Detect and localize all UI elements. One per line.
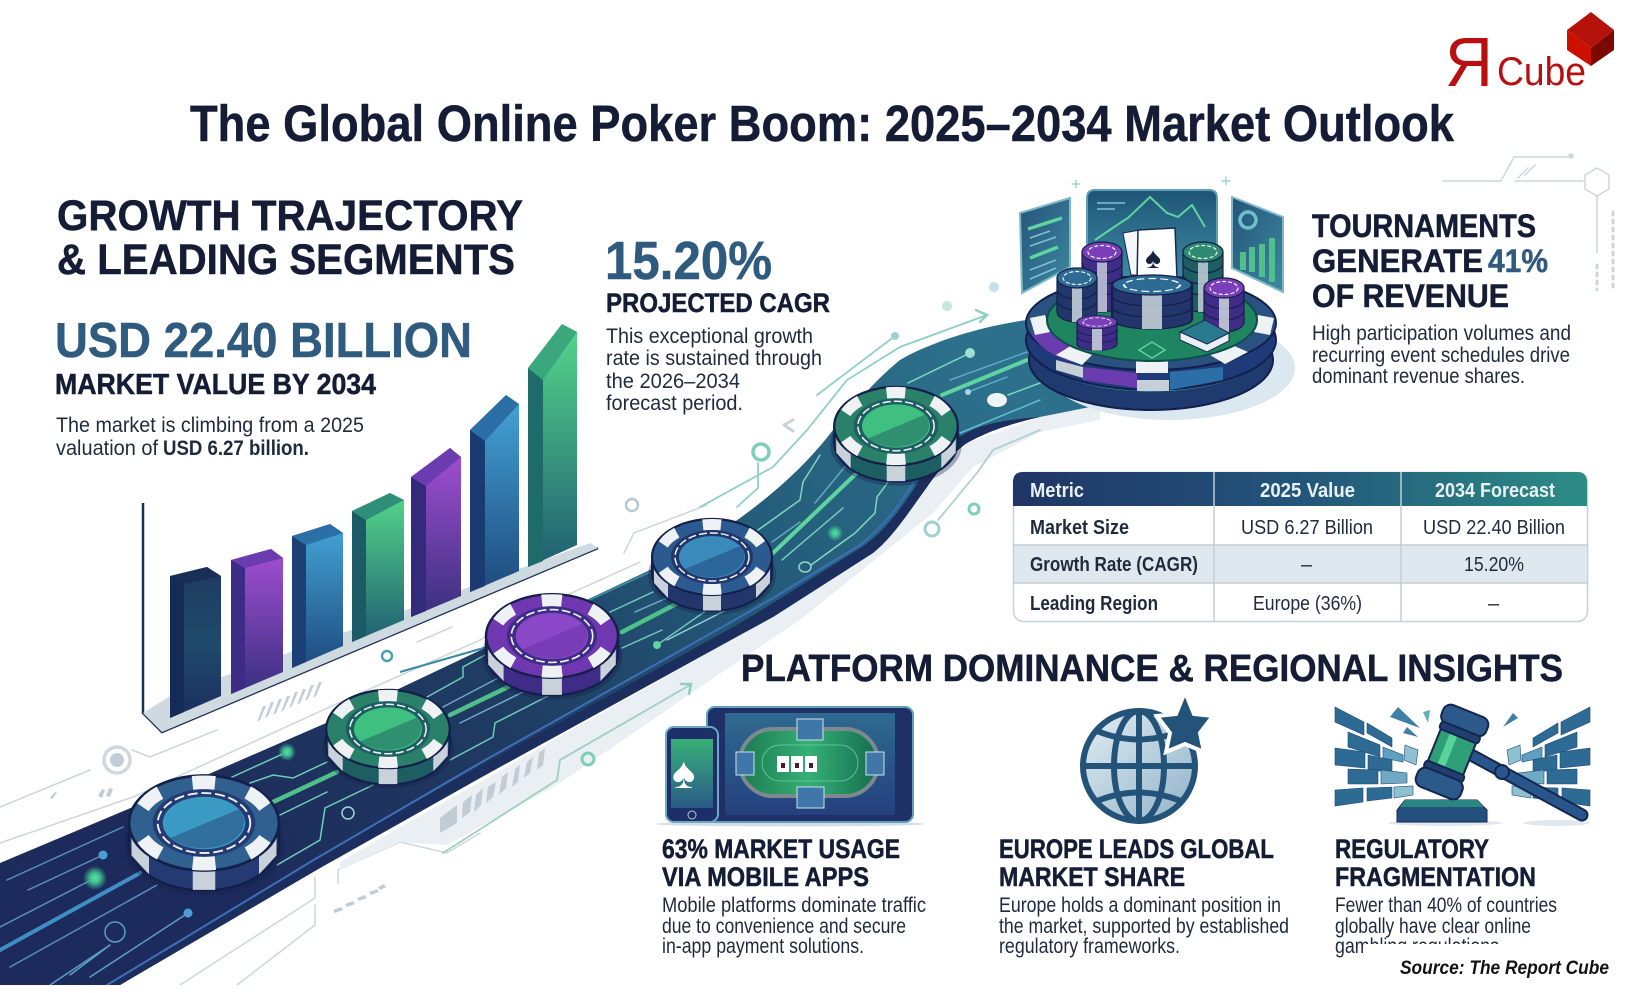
table row: market size: USD 22.40 Billion	[1423, 517, 1565, 539]
road circuit traces	[0, 348, 1040, 985]
hatch marks beside the road	[50, 682, 545, 913]
bar 2	[231, 549, 283, 694]
table row: growth rate: –	[1301, 554, 1313, 576]
table header labels: 2025 Value	[1260, 480, 1355, 502]
card: regulation	[1335, 834, 1557, 960]
platform middle layer	[1026, 290, 1276, 391]
stat: market value	[55, 314, 472, 460]
left bricks	[1335, 707, 1418, 806]
bar 1	[170, 567, 221, 718]
cards on table	[777, 756, 817, 772]
card: mobile apps	[662, 834, 926, 958]
logo wordmark: Cube	[1497, 50, 1586, 94]
table row: market size: USD 6.27 Billion	[1241, 517, 1373, 539]
table row: leading region: Leading Region	[1030, 593, 1158, 615]
bar 6	[470, 395, 519, 592]
road lower edge band	[110, 417, 1040, 985]
tablet screen	[725, 713, 895, 815]
chart base plate	[143, 543, 598, 732]
card: mobile apps: VIA MOBILE APPS	[662, 862, 869, 892]
card: europe: Europe holds a dominant position in	[999, 894, 1281, 917]
card: europe: regulatory frameworks.	[999, 935, 1180, 958]
icon: gavel breaking brick walls	[1335, 702, 1590, 826]
phone	[666, 727, 718, 822]
star	[1157, 692, 1213, 752]
heading: growth trajectory	[57, 192, 523, 284]
platform top rim	[1026, 276, 1276, 370]
stat: projected CAGR: forecast period.	[606, 392, 743, 415]
table header labels: 2034 Forecast	[1435, 480, 1555, 502]
table header labels	[1030, 480, 1555, 502]
bar 7	[528, 324, 577, 567]
bar 5	[411, 448, 461, 617]
platform rim stripes	[1030, 282, 1274, 373]
table row: growth rate: 15.20%	[1464, 554, 1524, 576]
card: regulation: Fewer than 40% of countries	[1335, 894, 1557, 917]
icon shadow	[655, 822, 925, 826]
icon: globe with star	[1083, 692, 1213, 821]
stat: projected CAGR: This exceptional growth	[606, 325, 813, 348]
stat: market value: USD 22.40 BILLION	[55, 314, 472, 368]
center chart panel	[1087, 190, 1217, 285]
felt diamond	[1139, 342, 1165, 358]
logo cube	[1567, 12, 1614, 66]
phone: ♠	[672, 749, 695, 798]
cards: ♠	[1145, 242, 1161, 275]
stat: market value: The market is climbing from a 2025	[56, 414, 364, 437]
table frame	[1014, 472, 1588, 622]
card: regulation: FRAGMENTATION	[1335, 862, 1536, 892]
right bricks	[1507, 707, 1590, 806]
road edge lines	[107, 480, 915, 985]
heading: growth trajectory: & LEADING SEGMENTS	[57, 236, 515, 284]
card: mobile apps: due to convenience and secure	[662, 915, 906, 938]
gavel handle	[1462, 750, 1582, 815]
source note: Source: The Report Cube	[1400, 958, 1609, 979]
circuit road track	[0, 320, 1100, 985]
card: europe: MARKET SHARE	[999, 862, 1185, 892]
table shaded row	[1014, 545, 1587, 583]
tablet	[707, 707, 913, 822]
left dashboard panel	[1020, 198, 1070, 293]
heading: growth trajectory: GROWTH TRAJECTORY	[57, 192, 523, 240]
heading: platform dominance: PLATFORM DOMINANCE & REGIONAL INSIGHTS	[741, 648, 1563, 690]
card: europe	[999, 834, 1289, 958]
platform shadow	[1045, 316, 1295, 420]
text: tournaments: OF REVENUE	[1312, 278, 1509, 314]
stat: market value: USD 6.27 billion.	[163, 437, 309, 460]
icon: mobile and tablet poker table	[655, 707, 925, 826]
text: tournaments: recurring event schedules drive	[1312, 344, 1570, 367]
card: mobile apps: 63% MARKET USAGE	[662, 834, 900, 864]
stat: projected CAGR	[605, 231, 830, 415]
bar 4	[352, 493, 404, 642]
title: The Global Online Poker Boom: 2025–2034 Market Outlook	[190, 95, 1455, 152]
stat: projected CAGR: 15.20%	[605, 231, 772, 291]
card: regulation: REGULATORY	[1335, 834, 1489, 864]
card: europe: the market, supported by established	[999, 915, 1289, 938]
chip 4: blue	[648, 519, 776, 615]
card: mobile apps: in-app payment solutions.	[662, 935, 864, 958]
illustration: tournament platform	[1020, 190, 1295, 420]
stat: projected CAGR: the 2026–2034	[606, 370, 740, 393]
text: tournaments: 41%	[1488, 243, 1548, 279]
text: tournaments: High participation volumes and	[1312, 322, 1571, 345]
shadows	[1388, 820, 1590, 826]
bar 3	[292, 524, 343, 668]
stat: projected CAGR: PROJECTED CAGR	[606, 288, 830, 318]
card: regulation: globally have clear online	[1335, 915, 1531, 938]
chart axes	[143, 503, 598, 732]
platform base layer	[1029, 310, 1273, 410]
card: europe: EUROPE LEADS GLOBAL	[999, 834, 1274, 864]
card: regulation: gambling regulations	[1335, 935, 1499, 958]
table row: leading region	[1030, 593, 1500, 615]
stat: market value: MARKET VALUE BY 2034	[55, 369, 376, 401]
stat: market value: valuation of	[56, 437, 158, 460]
bar chart: growth	[143, 324, 598, 732]
chip stacks	[1082, 242, 1122, 312]
text: tournaments	[1312, 208, 1571, 388]
table row: growth rate: Growth Rate (CAGR)	[1030, 554, 1198, 576]
table row: market size	[1030, 517, 1565, 539]
text: tournaments: GENERATE	[1312, 243, 1483, 279]
gavel head	[1413, 702, 1491, 802]
chip 3: purple	[482, 594, 622, 700]
gavel base	[1397, 800, 1487, 822]
chip 2: green	[322, 690, 454, 789]
stat: projected CAGR: rate is sustained through	[606, 347, 822, 370]
table row: leading region: –	[1488, 593, 1500, 615]
card: mobile apps: Mobile platforms dominate traffic	[662, 894, 926, 917]
data table	[1013, 472, 1588, 622]
platform felt	[1047, 279, 1257, 361]
globe	[1083, 711, 1195, 821]
table header	[1013, 472, 1587, 506]
platform purple rim section	[1032, 325, 1085, 362]
logo mirrored R: R	[1445, 23, 1493, 101]
chip 5: green	[830, 387, 962, 486]
card deck	[1180, 320, 1229, 352]
logo: RCube	[1445, 12, 1614, 101]
table header labels: Metric	[1030, 480, 1084, 502]
cards	[1123, 228, 1177, 282]
table row: leading region: Europe (36%)	[1253, 593, 1362, 615]
table row: market size: Market Size	[1030, 517, 1129, 539]
right dashboard panel	[1232, 197, 1283, 292]
debris	[1390, 707, 1518, 737]
teal circuit accents and arrows	[104, 177, 1230, 853]
table row: growth rate	[1030, 554, 1524, 576]
light band beneath the road	[340, 405, 1100, 870]
text: tournaments: TOURNAMENTS	[1312, 208, 1536, 244]
seats	[736, 719, 884, 808]
text: tournaments: dominant revenue shares.	[1312, 365, 1525, 388]
chip 1: blue	[124, 776, 284, 896]
poker table	[740, 729, 878, 796]
